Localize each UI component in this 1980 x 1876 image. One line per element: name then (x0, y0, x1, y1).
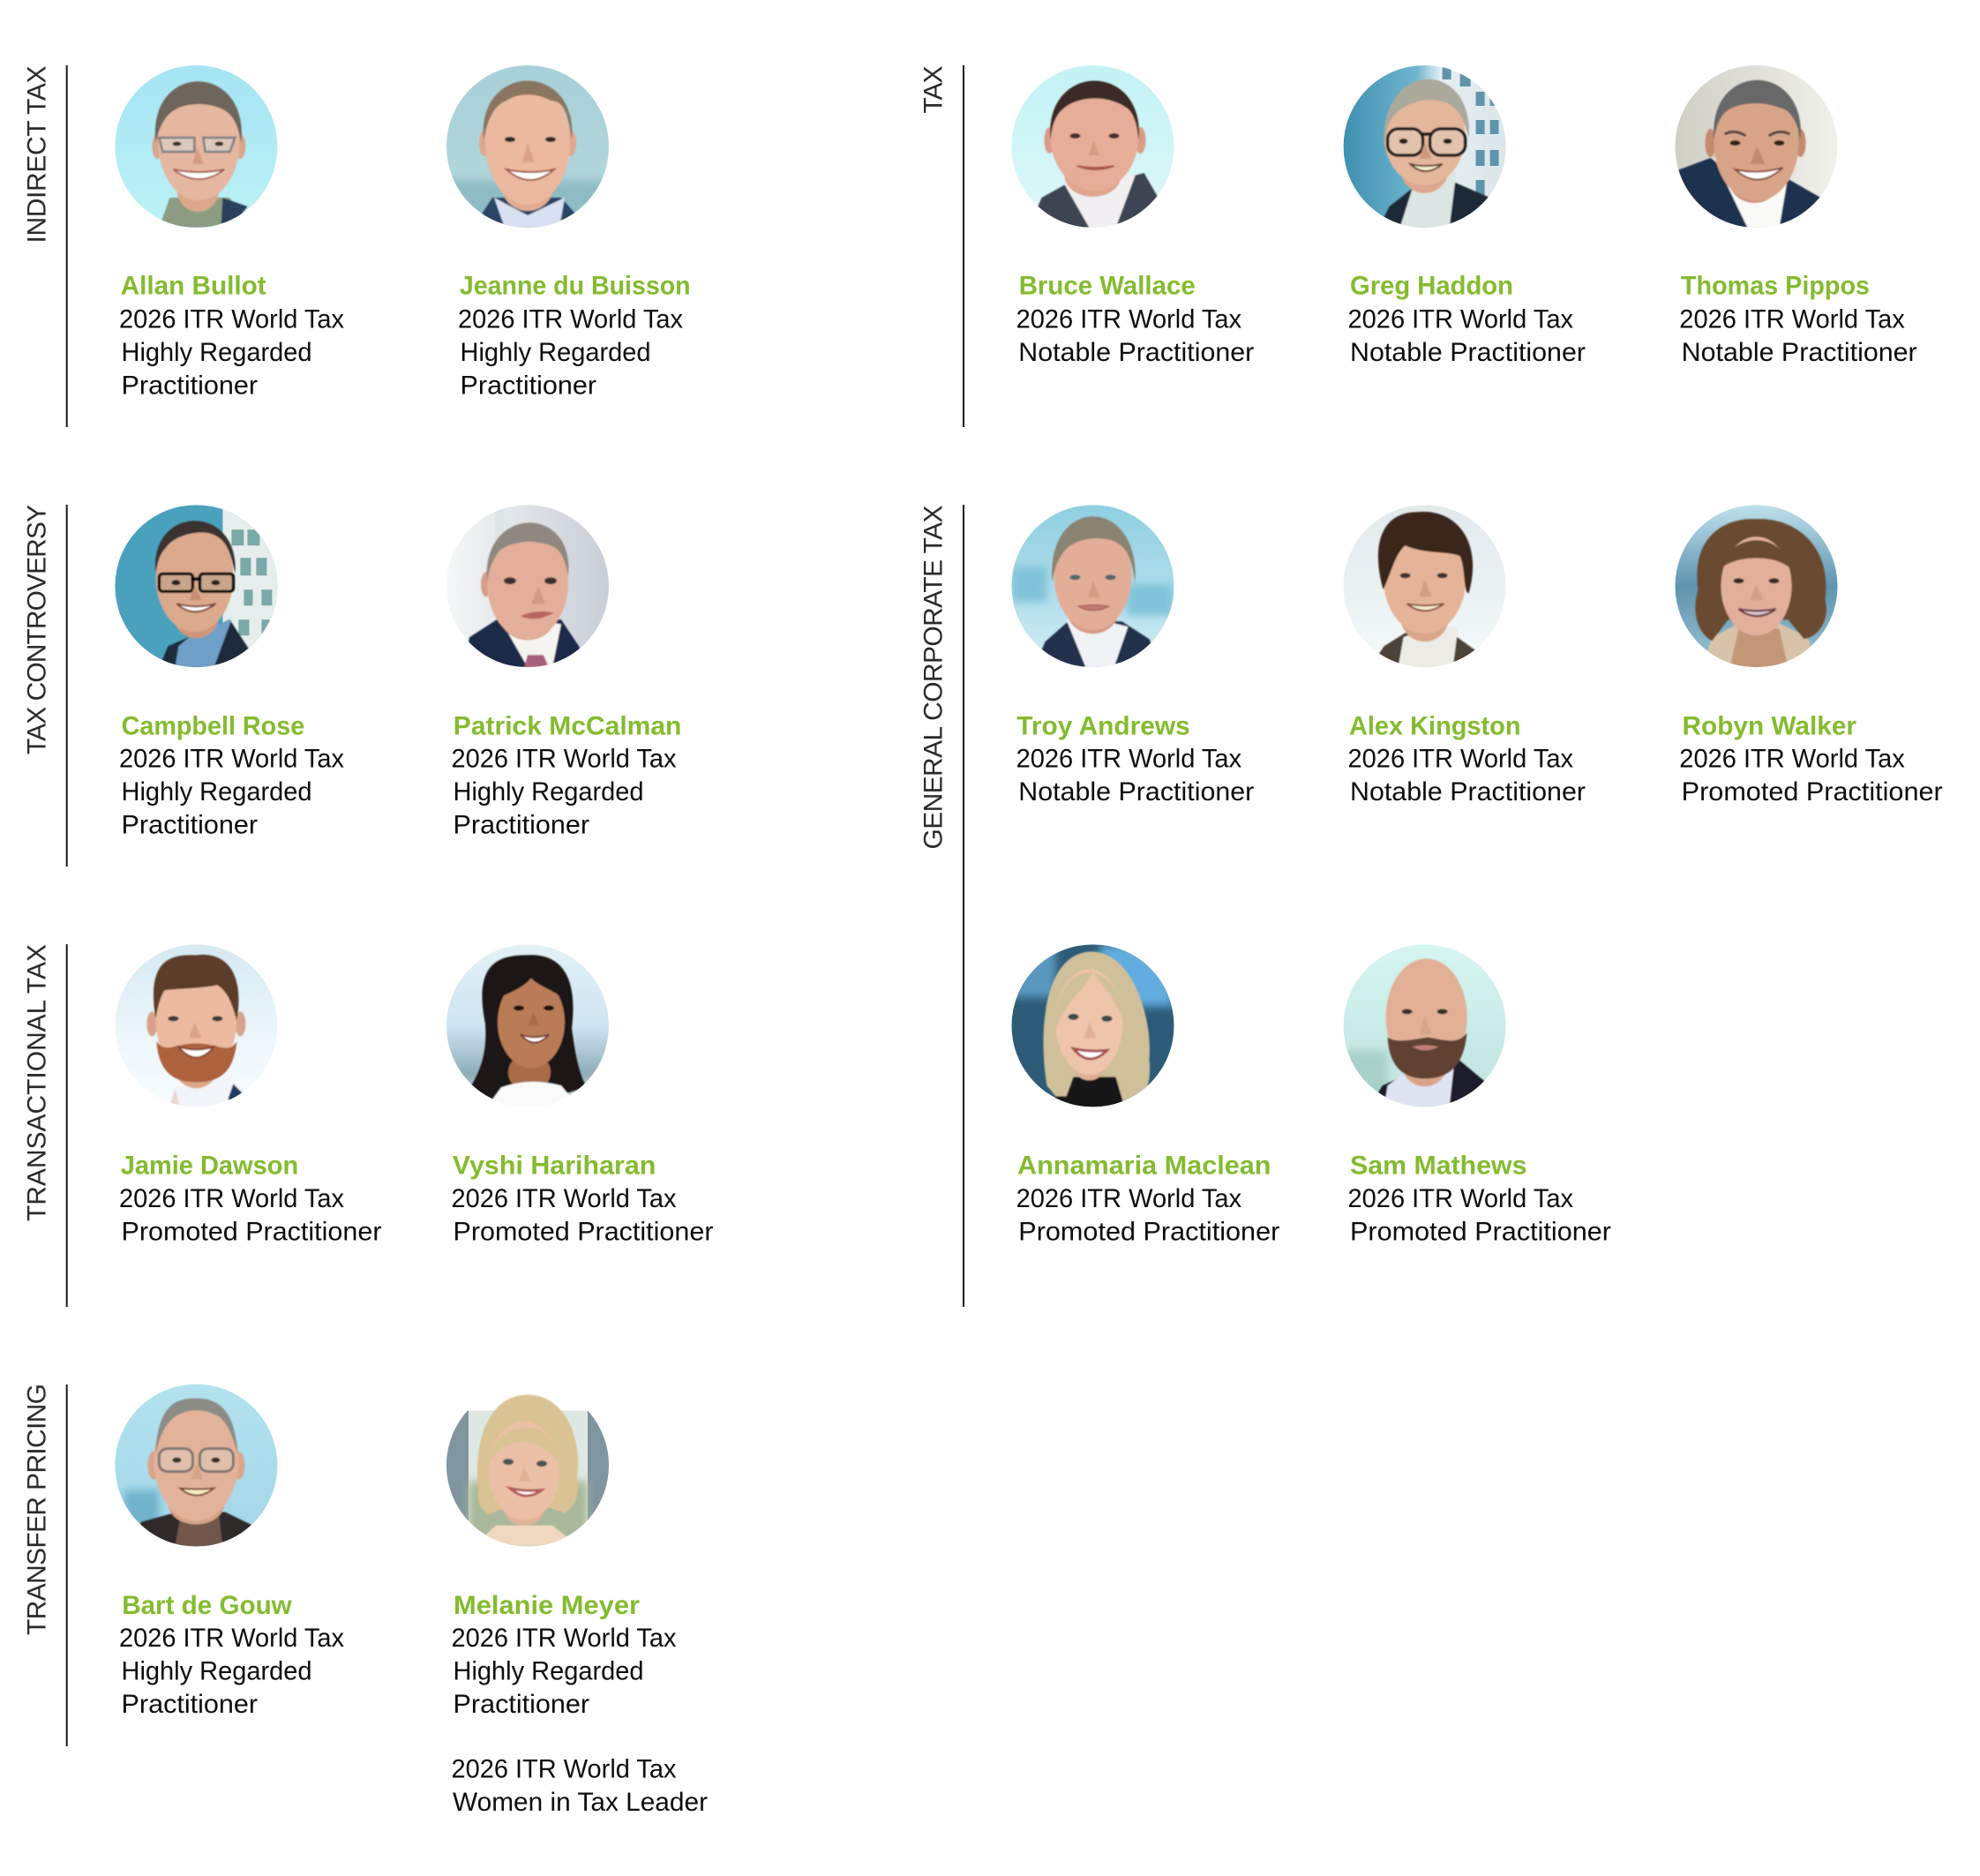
section label: Transfer Pricing: TRANSFER PRICING (23, 1384, 51, 1635)
profile: Patrick McCalman (446, 505, 681, 840)
award: Allan Bullot: 2026 ITR World Tax (119, 305, 344, 334)
award: Bart de Gouw: Practitioner (122, 1690, 258, 1719)
award: Jeanne du Buisson: Highly Regarded (461, 338, 651, 367)
award: Jeanne du Buisson: 2026 ITR World Tax (458, 305, 683, 334)
award: Troy Andrews: 2026 ITR World Tax (1016, 745, 1241, 774)
profile: Allan Bullot (115, 65, 344, 401)
profile: Robyn Walker (1675, 505, 1943, 807)
section label: Tax: TAX (919, 65, 948, 113)
portrait: Bruce Wallace (1011, 65, 1174, 228)
portrait: Jamie Dawson (115, 944, 277, 1107)
name: Vyshi Hariharan: Vyshi Hariharan (453, 1152, 656, 1181)
portrait: Allan Bullot (115, 65, 277, 228)
award: Allan Bullot: Practitioner (122, 371, 258, 401)
award: Bruce Wallace (1016, 305, 1254, 367)
portrait: Vyshi Hariharan (446, 944, 609, 1107)
award: Bruce Wallace: 2026 ITR World Tax (1016, 305, 1241, 334)
award: Melanie Meyer, Highly Regarded: 2026 ITR World Tax (452, 1624, 676, 1653)
name: Alex Kingston: Alex Kingston (1349, 711, 1521, 741)
name: Annamaria Maclean: Annamaria Maclean (1017, 1152, 1271, 1181)
award: Vyshi Hariharan: 2026 ITR World Tax (452, 1184, 676, 1213)
award: Campbell Rose (119, 745, 344, 840)
name: Melanie Meyer: Melanie Meyer (454, 1591, 640, 1620)
award: Vyshi Hariharan: Promoted Practitioner (454, 1217, 713, 1246)
award: Patrick McCalman (452, 745, 676, 840)
section divider: Transactional Tax (66, 944, 68, 1307)
award: Sam Mathews: Promoted Practitioner (1350, 1217, 1611, 1246)
award: Jamie Dawson (119, 1184, 381, 1246)
award: Melanie Meyer, Highly Regarded: Highly Regarded (454, 1657, 644, 1686)
profile: Sam Mathews (1344, 944, 1611, 1246)
award: Vyshi Hariharan (452, 1184, 713, 1246)
portrait: Annamaria Maclean (1011, 944, 1174, 1107)
section divider: Tax (963, 65, 964, 427)
name: Bruce Wallace: Bruce Wallace (1019, 272, 1196, 300)
award: Thomas Pippos: Notable Practitioner (1682, 338, 1917, 367)
award: Jeanne du Buisson: Practitioner (461, 371, 596, 401)
profile: Bart de Gouw (115, 1384, 344, 1719)
portrait: Greg Haddon (1344, 65, 1506, 228)
name: Troy Andrews: Troy Andrews (1016, 711, 1190, 741)
name: Bart de Gouw: Bart de Gouw (122, 1591, 292, 1620)
award: Campbell Rose: Practitioner (122, 811, 258, 840)
name: Jeanne du Buisson: Jeanne du Buisson (460, 272, 691, 300)
award: Greg Haddon: 2026 ITR World Tax (1348, 305, 1573, 334)
portrait: Patrick McCalman (446, 505, 609, 667)
award: Allan Bullot: Highly Regarded (122, 338, 312, 367)
section divider: Transfer Pricing (66, 1384, 68, 1746)
section divider: General Corporate Tax (963, 505, 964, 1307)
profile: Thomas Pippos (1675, 65, 1917, 367)
award: Troy Andrews: Notable Practitioner (1018, 777, 1254, 807)
name: Allan Bullot: Allan Bullot (121, 272, 266, 300)
award: Alex Kingston (1348, 745, 1586, 807)
award: Troy Andrews (1016, 745, 1254, 807)
portrait: Troy Andrews (1011, 505, 1174, 667)
name: Campbell Rose: Campbell Rose (122, 711, 304, 741)
award: Melanie Meyer, Women in Tax Leader (452, 1754, 708, 1817)
section label: Transactional Tax: TRANSACTIONAL TAX (23, 944, 51, 1221)
portrait: Robyn Walker (1675, 505, 1837, 667)
award: Melanie Meyer, Highly Regarded (452, 1624, 676, 1719)
portrait: Jeanne du Buisson (446, 65, 609, 228)
award: Bart de Gouw: 2026 ITR World Tax (119, 1624, 344, 1653)
portrait: Sam Mathews (1344, 944, 1506, 1107)
award: Robyn Walker: 2026 ITR World Tax (1679, 745, 1905, 774)
profile: Troy Andrews (1011, 505, 1254, 807)
award: Sam Mathews: 2026 ITR World Tax (1348, 1184, 1573, 1213)
profile: Campbell Rose (115, 505, 344, 840)
portrait: Alex Kingston (1344, 505, 1506, 667)
section label: Indirect Tax: INDIRECT TAX (23, 65, 51, 244)
portrait: Bart de Gouw (115, 1384, 277, 1547)
award: Bart de Gouw (119, 1624, 344, 1719)
award: Greg Haddon: Notable Practitioner (1350, 338, 1586, 367)
award: Allan Bullot (119, 305, 344, 401)
award: Annamaria Maclean: Promoted Practitioner (1018, 1217, 1279, 1246)
award: Patrick McCalman: Highly Regarded (454, 777, 644, 807)
award: Campbell Rose: 2026 ITR World Tax (119, 745, 344, 774)
award: Alex Kingston: Notable Practitioner (1350, 777, 1586, 807)
award: Melanie Meyer, Women in Tax Leader: Women in Tax Leader (453, 1788, 708, 1817)
award: Robyn Walker (1679, 745, 1943, 807)
award: Jamie Dawson: Promoted Practitioner (122, 1217, 381, 1246)
profile: Annamaria Maclean (1011, 944, 1279, 1246)
award: Bruce Wallace: Notable Practitioner (1018, 338, 1254, 367)
award: Thomas Pippos: 2026 ITR World Tax (1679, 305, 1905, 334)
name: Robyn Walker: Robyn Walker (1682, 711, 1856, 741)
section divider: Tax Controversy (66, 505, 68, 867)
award: Jeanne du Buisson (458, 305, 683, 401)
award: Greg Haddon (1348, 305, 1586, 367)
profile: Jamie Dawson (115, 944, 381, 1246)
award: Bart de Gouw: Highly Regarded (122, 1657, 312, 1686)
award: Alex Kingston: 2026 ITR World Tax (1348, 745, 1573, 774)
name: Jamie Dawson: Jamie Dawson (121, 1152, 298, 1181)
award: Thomas Pippos (1679, 305, 1917, 367)
name: Greg Haddon: Greg Haddon (1350, 272, 1513, 300)
profile: Alex Kingston (1344, 505, 1586, 807)
award: Campbell Rose: Highly Regarded (122, 777, 312, 807)
portrait: Melanie Meyer (446, 1384, 609, 1547)
award: Sam Mathews (1348, 1184, 1611, 1246)
section label: Tax Controversy: TAX CONTROVERSY (23, 505, 51, 754)
profile: Melanie Meyer (446, 1384, 708, 1817)
name: Sam Mathews: Sam Mathews (1350, 1152, 1526, 1181)
section label: General Corporate Tax: GENERAL CORPORATE TAX (919, 505, 948, 849)
profile: Vyshi Hariharan (446, 944, 713, 1246)
section divider: Indirect Tax (66, 65, 68, 427)
profile: Bruce Wallace (1011, 65, 1254, 367)
award: Annamaria Maclean: 2026 ITR World Tax (1016, 1184, 1241, 1213)
profile: Greg Haddon (1344, 65, 1586, 367)
name: Patrick McCalman: Patrick McCalman (454, 711, 681, 741)
award: Melanie Meyer, Highly Regarded: Practitioner (454, 1690, 589, 1719)
award: Annamaria Maclean (1016, 1184, 1279, 1246)
award: Patrick McCalman: 2026 ITR World Tax (452, 745, 676, 774)
profile: Jeanne du Buisson (446, 65, 691, 401)
award: Patrick McCalman: Practitioner (454, 811, 589, 840)
award: Melanie Meyer, Women in Tax Leader: 2026 ITR World Tax (452, 1754, 676, 1783)
award: Robyn Walker: Promoted Practitioner (1682, 777, 1943, 807)
portrait: Thomas Pippos (1675, 65, 1837, 228)
name: Thomas Pippos: Thomas Pippos (1681, 272, 1870, 300)
portrait: Campbell Rose (115, 505, 277, 667)
award: Jamie Dawson: 2026 ITR World Tax (119, 1184, 344, 1213)
